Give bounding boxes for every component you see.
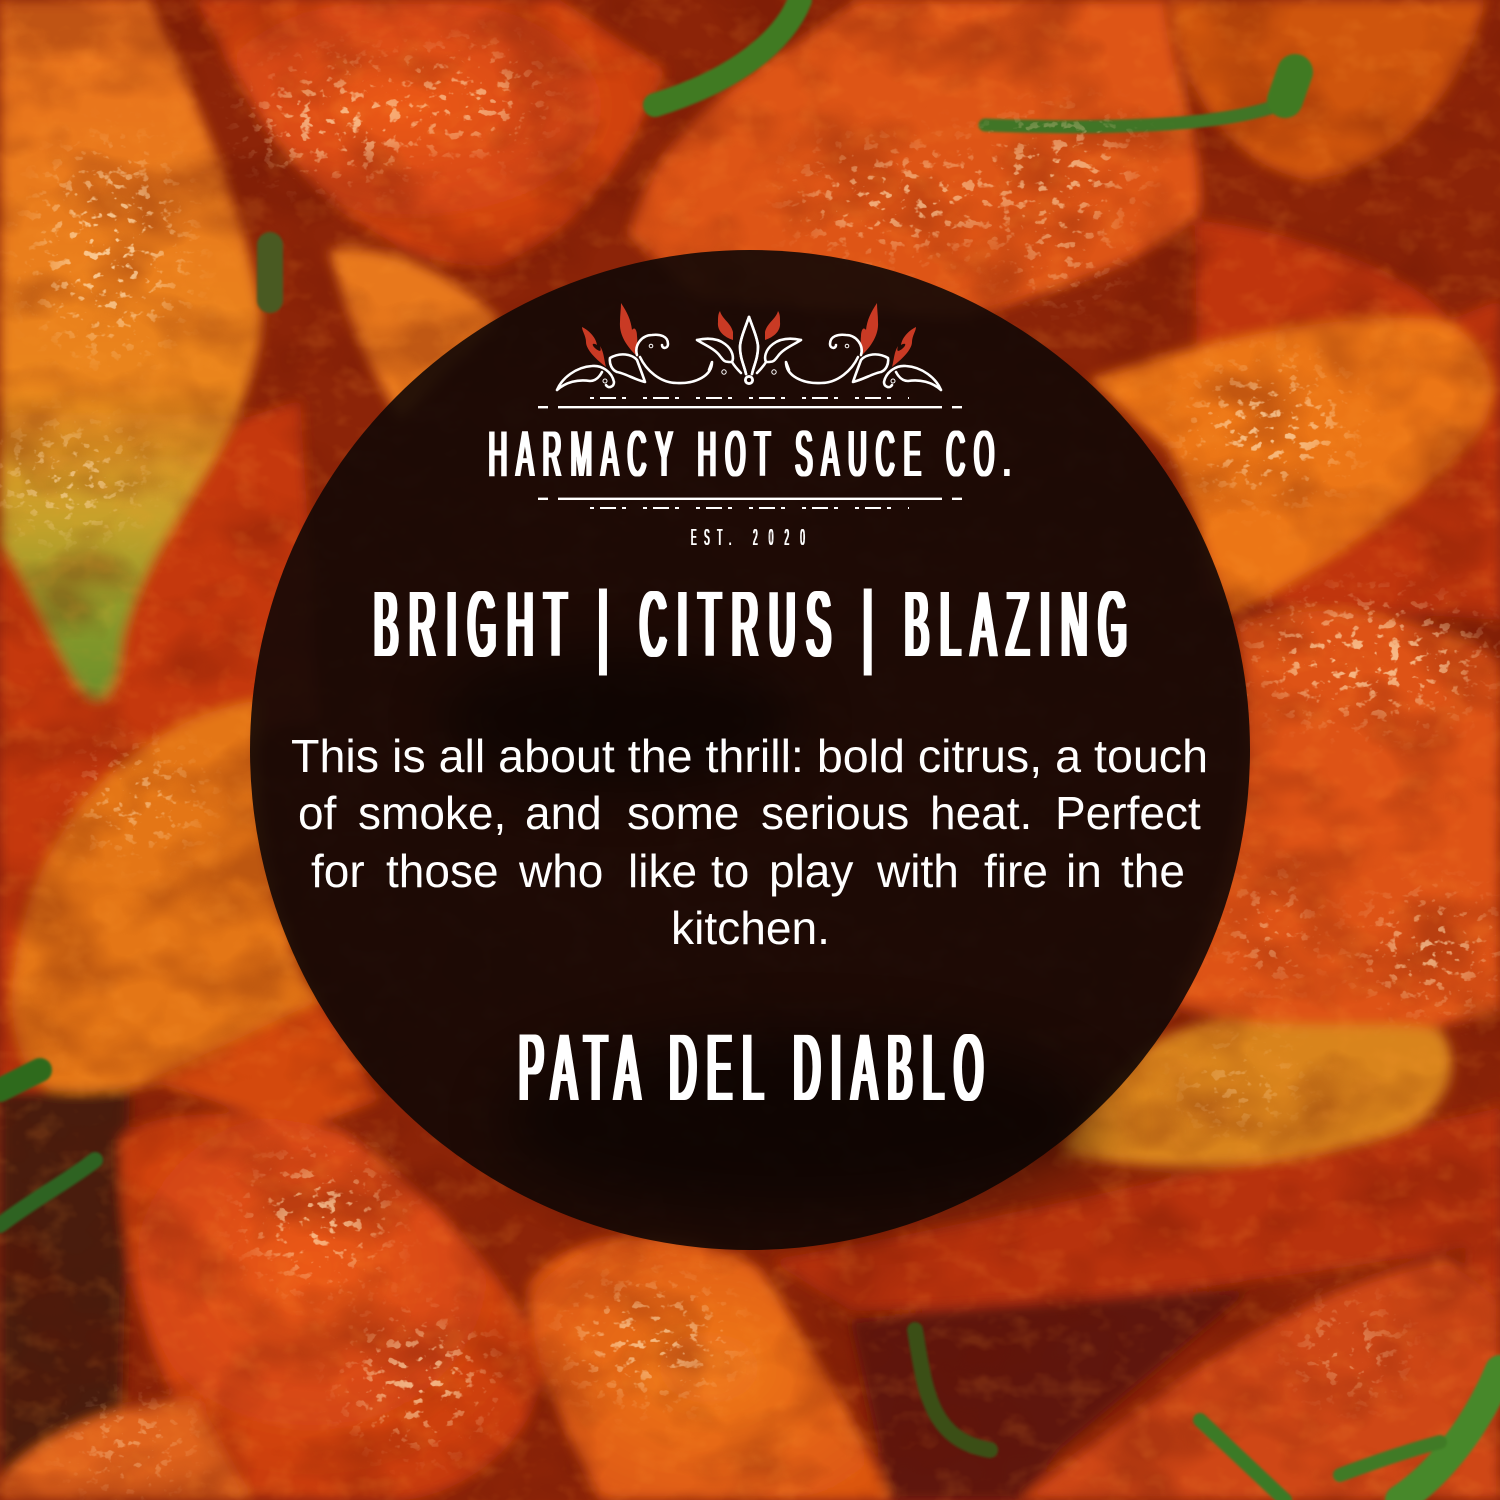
description text: serious [761, 787, 909, 839]
pepper: far right edge [1465, 1100, 1500, 1300]
description text: and [525, 787, 602, 839]
logo: Harmacy Hot Sauce Co. [488, 303, 1011, 550]
description text: some [627, 787, 739, 839]
pepper: lower left dark [0, 1090, 130, 1500]
pepper: top right large [630, 0, 1201, 320]
pepper: dark lower gap [850, 1290, 1250, 1500]
description text: fire [984, 845, 1048, 897]
pepper: bottom centre [528, 1236, 890, 1500]
dark translucent circle panel [250, 250, 1250, 1250]
description text: in [1066, 845, 1102, 897]
pepper: top centre [195, 0, 665, 266]
description text: to [711, 845, 749, 897]
pepper: left middle [12, 700, 320, 1092]
description text: with [876, 845, 959, 897]
pepper: right orange [1090, 318, 1492, 615]
description text: the [1121, 845, 1185, 897]
description text: of [298, 787, 337, 839]
pepper: lower right yellow [1060, 1020, 1452, 1166]
logo established date [691, 524, 805, 550]
description text: those [386, 845, 499, 897]
pepper: small left of circle [330, 249, 500, 420]
pepper: under left middle [150, 1000, 380, 1130]
logo rule bottom [538, 498, 962, 508]
pepper: right red [1195, 220, 1500, 620]
pepper: red area left [0, 400, 320, 1100]
description text: who [518, 845, 603, 897]
logo established date: 2020 [753, 524, 805, 550]
pepper: top far right [1170, 0, 1485, 180]
logo name: HARMACY HOT SAUCE CO. [488, 418, 1011, 490]
logo rule top [538, 398, 962, 408]
icon: chili and scroll ornament [557, 303, 941, 390]
heading: flavour words: BRIGHT | CITRUS | BLAZING [374, 572, 1127, 676]
description text: smoke, [358, 787, 506, 839]
description text: Perfect [1055, 787, 1201, 839]
circle shading [440, 650, 1100, 1210]
pepper: top left long [0, 0, 262, 700]
logo established date: EST. [691, 524, 731, 550]
pepper: lower right red [770, 1110, 1500, 1310]
product name: PATA DEL DIABLO [519, 1016, 983, 1121]
description text: play [769, 845, 853, 897]
description text: heat. [930, 787, 1032, 839]
description text: for [311, 845, 365, 897]
description text: This is all about the thrill: bold citrus, a touch [291, 730, 1208, 782]
description text: kitchen. [671, 902, 830, 954]
description text: like [628, 845, 697, 897]
description text [291, 730, 1208, 954]
pepper: bottom right [1020, 1260, 1500, 1500]
pepper: right middle [1170, 610, 1500, 1034]
pepper: bottom left [120, 1114, 545, 1500]
pepper: bottom left small [0, 1400, 250, 1500]
